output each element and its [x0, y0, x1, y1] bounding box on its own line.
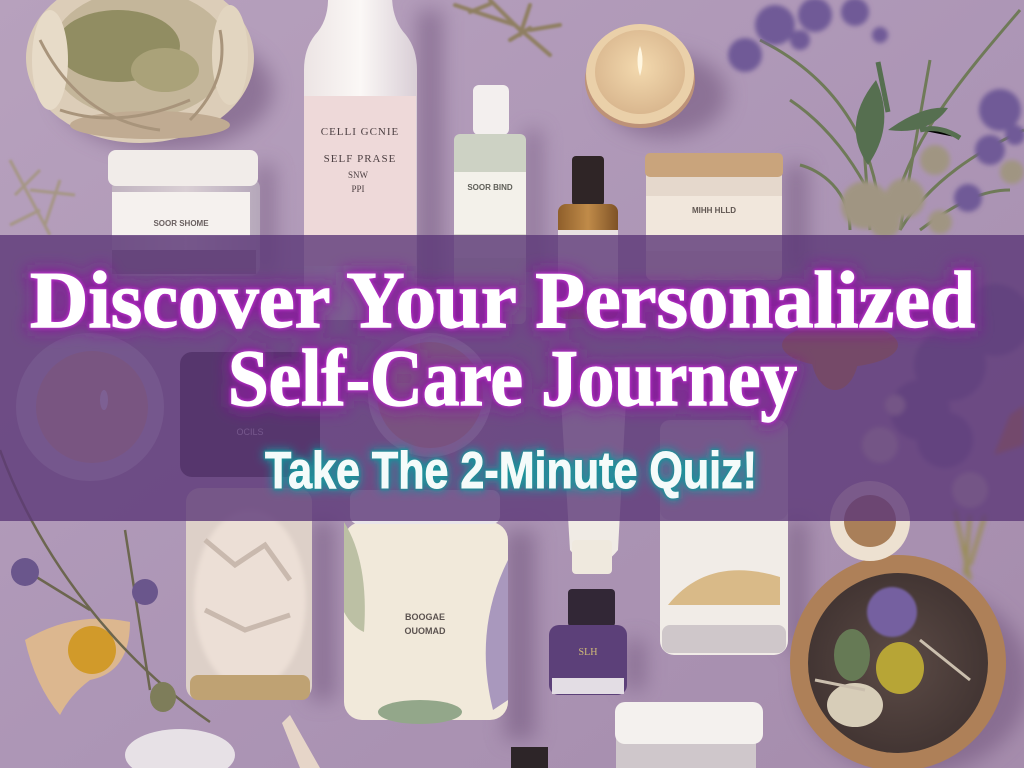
jar: white lid jar left: [108, 150, 260, 276]
turmeric shell: [25, 619, 130, 715]
basket: woven bowl top left: [26, 0, 254, 143]
clear jar right: [660, 420, 788, 655]
subtitle: call to action: Take The 2-Minute Quiz!: [265, 442, 757, 500]
title line 1: Discover Your Personalized: [30, 257, 975, 345]
title line 1: Discover Your Personalized: [30, 257, 975, 345]
cream jar wood lid: MIHH HLLD: [692, 206, 736, 215]
title line 2: Self-Care Journey: [228, 335, 797, 423]
dried sprig left: [10, 160, 75, 235]
purple translucent band: [0, 235, 1024, 521]
large floral jar: OUOMAD: [404, 626, 446, 636]
small purple bottle: [549, 589, 627, 695]
bottle: tall pink label: PPI: [351, 184, 365, 194]
jar: white lid jar left: SOOR SHOME: [153, 219, 209, 228]
small purple bottle: SLH: [579, 647, 597, 658]
bottle: tall pink label: [304, 0, 417, 320]
bottle: tall pink label: SNW: [348, 170, 369, 180]
stoneware mortar: [790, 555, 1006, 768]
title: [30, 257, 975, 423]
subtitle: call to action: Take The 2-Minute Quiz!: [265, 442, 757, 500]
bottle: tall pink label: CELLI GCNIE: [321, 126, 399, 138]
dropper bottle: [558, 156, 618, 319]
subtitle: call to action: Take The 2-Minute Quiz!: [265, 442, 757, 500]
dark jar: [180, 352, 320, 700]
orange flower: [782, 314, 898, 390]
pump bottle: [454, 85, 526, 324]
fig slice: [830, 481, 910, 561]
title line 2: Self-Care Journey: [228, 335, 797, 423]
title glow: [30, 257, 975, 423]
title glow: Self-Care Journey: [228, 335, 797, 423]
dried lavender sprig bottom left: [0, 450, 210, 722]
bottom salt dish and dropper: [125, 715, 548, 768]
bottle: tall pink label: SELF PRASE: [324, 153, 396, 165]
dried herbs top center: [455, 0, 560, 55]
small white jar bottom: [615, 702, 763, 768]
lavender bouquet top right: [728, 0, 1024, 238]
candle left: [16, 333, 164, 481]
dried flowers right: [862, 284, 1024, 580]
large floral jar: BOOGAE: [405, 612, 445, 622]
large floral jar: [344, 490, 508, 724]
candle top: [585, 24, 695, 128]
pump bottle: SOOR BIND: [467, 183, 513, 192]
candle center: [368, 333, 492, 457]
title glow: Discover Your Personalized: [30, 257, 975, 345]
cream jar wood lid: [645, 153, 783, 280]
dark jar: OCILS: [236, 427, 264, 437]
tube center: [561, 400, 626, 574]
